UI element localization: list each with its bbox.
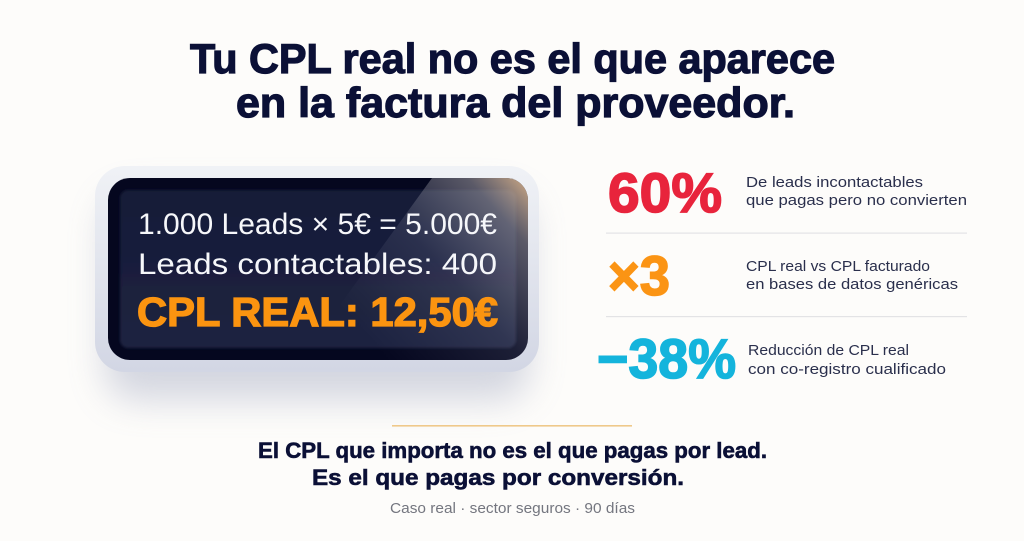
- title: en la factura del proveedor.: [236, 79, 795, 126]
- stat: x3: ×3: [608, 244, 670, 307]
- stat: x3: [608, 244, 958, 307]
- calculation line 2: Leads contactables: 400: [138, 248, 497, 281]
- source note: Caso real · sector seguros · 90 días: [390, 500, 635, 517]
- stat: -38%: Reducción de CPL real: [748, 342, 909, 359]
- calculation line 1: 1.000 Leads × 5€ = 5.000€: [138, 208, 497, 241]
- stat: x3: en bases de datos genéricas: [746, 276, 958, 293]
- stat: 60%: 60%: [608, 161, 722, 224]
- stat: 60%: De leads incontactables: [746, 174, 923, 191]
- title: Tu CPL real no es el que aparece: [190, 35, 835, 82]
- conclusion: El CPL que importa no es el que pagas por lead.: [258, 438, 767, 463]
- stat: 60%: que pagas pero no convierten: [746, 192, 967, 209]
- title: [190, 35, 835, 126]
- stat: -38%: con co-registro cualificado: [748, 361, 946, 378]
- conclusion: Es el que pagas por conversión.: [312, 465, 684, 490]
- stat: x3: CPL real vs CPL facturado: [746, 258, 930, 275]
- stat: -38%: [597, 327, 946, 390]
- panel: CPL calculation screen: [95, 166, 539, 400]
- stat: 60%: [608, 161, 967, 224]
- real CPL result: CPL REAL: 12,50€: [137, 289, 498, 335]
- conclusion: [258, 438, 767, 490]
- stat: -38%: −38%: [597, 327, 736, 390]
